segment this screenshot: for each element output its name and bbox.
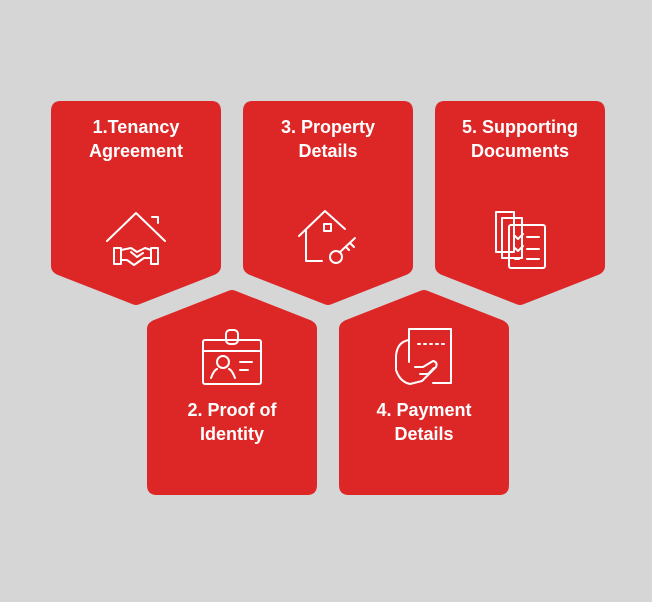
heading: payment details: 4. Payment [376, 400, 472, 420]
icon: house handshake [107, 213, 165, 265]
heading: tenancy agreement: Agreement [89, 141, 183, 161]
panel: payment details [339, 290, 509, 495]
heading: supporting documents: Documents [471, 141, 569, 161]
heading: proof of identity: 2. Proof of [188, 400, 276, 420]
icon: payment hand [396, 329, 451, 384]
heading: tenancy agreement: 1.Tenancy [93, 117, 179, 137]
icon: house key [299, 211, 355, 263]
panel: proof of identity [147, 290, 317, 495]
panel: property details [243, 101, 413, 305]
icon: id card [203, 330, 261, 384]
icon: documents [496, 212, 545, 268]
panel: supporting documents [435, 101, 605, 305]
heading: supporting documents: 5. Supporting [462, 117, 578, 137]
heading: property details: Details [298, 141, 358, 161]
heading: proof of identity: Identity [200, 424, 264, 444]
heading: payment details: Details [394, 424, 454, 444]
panel: tenancy agreement [51, 101, 221, 305]
heading: property details: 3. Property [281, 117, 375, 137]
